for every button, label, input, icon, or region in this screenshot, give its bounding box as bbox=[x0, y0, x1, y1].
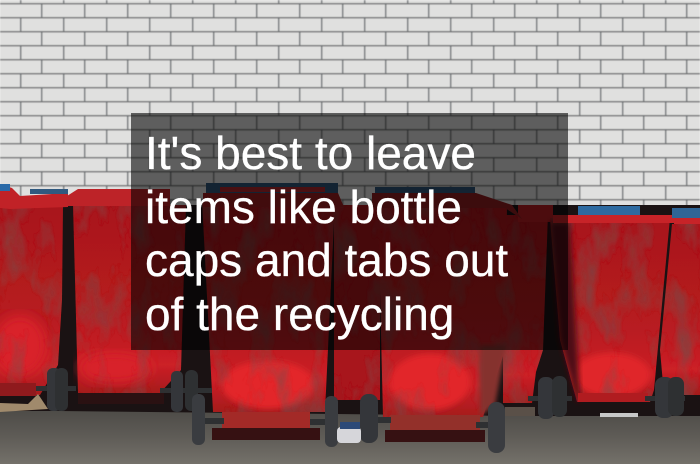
bin 4, behind bbox=[334, 205, 380, 400]
headline: It's best to leave bbox=[145, 127, 476, 179]
headline bbox=[145, 127, 508, 340]
headline: items like bottle bbox=[145, 180, 462, 232]
bin 1 bbox=[0, 184, 68, 396]
text panel bbox=[131, 113, 568, 350]
wheels and axles bbox=[36, 368, 685, 453]
bin 7 bbox=[550, 206, 674, 402]
bin 8 bbox=[660, 208, 700, 395]
bin 2 bbox=[67, 189, 186, 404]
bin 3, front bbox=[202, 183, 344, 440]
headline: caps and tabs out bbox=[145, 234, 508, 286]
bin 6 bbox=[503, 205, 553, 403]
brick wall bbox=[0, 0, 700, 215]
bin 5, front bbox=[372, 187, 522, 442]
headline: of the recycling bbox=[145, 288, 454, 340]
litter bbox=[0, 394, 638, 443]
ground bbox=[0, 408, 700, 464]
shadow behind the bins bbox=[0, 205, 700, 416]
